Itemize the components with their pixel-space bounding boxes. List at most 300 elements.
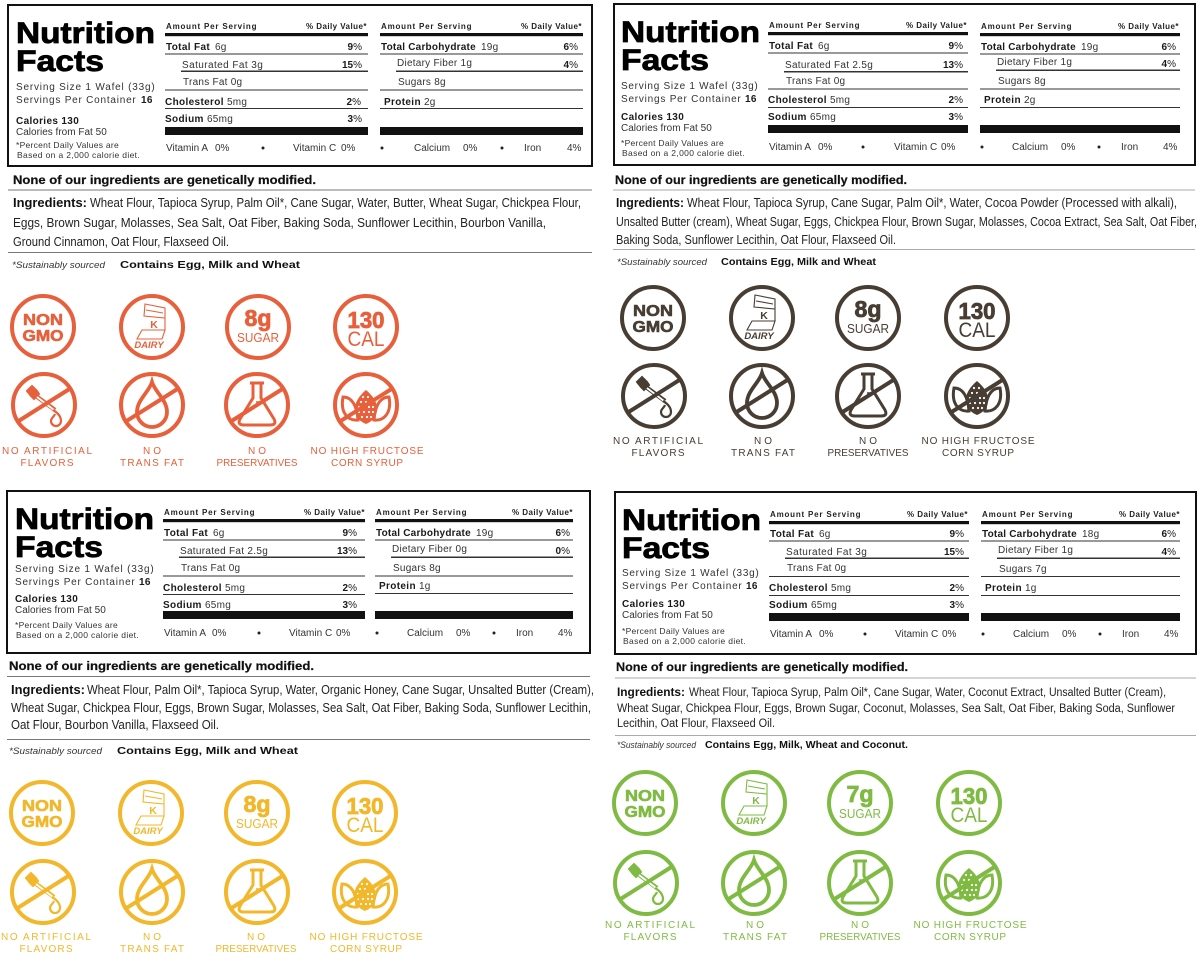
icon: non gmo: GMO bbox=[624, 804, 666, 821]
nutrient table: carbohydrates: Sugars 8g bbox=[398, 77, 446, 88]
vitamins row: 0% bbox=[818, 142, 833, 153]
GMO statement: None of our ingredients are genetically modified. bbox=[9, 659, 314, 673]
icon labels: NO ARTIFICIAL bbox=[1, 932, 91, 943]
nutrient table: fats: Trans Fat 0g bbox=[787, 563, 846, 574]
nutrient table: carbohydrates: Amount Per Serving bbox=[376, 508, 467, 517]
vitamins row: 4% bbox=[567, 143, 582, 154]
icon labels: NO bbox=[754, 436, 772, 447]
title bbox=[15, 503, 154, 564]
nutrient table: fats: Saturated Fat 3g bbox=[182, 60, 263, 71]
nutrient table: fats: 2% bbox=[347, 97, 361, 108]
icon: dairy bbox=[723, 772, 785, 834]
nutrient table: fats: Trans Fat 0g bbox=[786, 76, 845, 87]
icon: sugar: 8g bbox=[244, 791, 270, 817]
serving info: Serving Size 1 Wafel (33g) bbox=[622, 568, 759, 579]
nutrient table: fats bbox=[165, 22, 368, 135]
ingredients bbox=[617, 685, 1175, 730]
icon: calories bbox=[938, 772, 1000, 834]
panel: orange flavor bbox=[2, 5, 592, 469]
icon labels: NO HIGH FRUCTOSE bbox=[310, 446, 424, 457]
title: Facts bbox=[16, 45, 104, 78]
allergen note: Contains Egg, Milk and Wheat bbox=[117, 746, 299, 757]
nutrient table: fats: Cholesterol bbox=[163, 583, 222, 594]
nutrient table: carbohydrates: % Daily Value* bbox=[1119, 510, 1180, 519]
icon: dairy bbox=[120, 782, 182, 844]
vitamins row bbox=[769, 142, 1178, 153]
icon: sugar: SUGAR bbox=[847, 321, 889, 336]
icon labels: NO bbox=[248, 446, 266, 457]
icon: no high fructose corn syrup bbox=[938, 852, 1000, 914]
nutrient table: carbohydrates: % Daily Value* bbox=[521, 22, 582, 31]
nutrient table: fats: Sodium bbox=[163, 600, 202, 611]
ingredients: Ingredients: bbox=[616, 196, 684, 210]
nutrient table: fats: Sodium bbox=[769, 600, 808, 611]
serving info: Servings Per Container bbox=[621, 94, 741, 105]
icon labels: NO bbox=[851, 920, 869, 931]
nutrient table: carbohydrates bbox=[380, 22, 583, 135]
icon: calories: 130 bbox=[348, 307, 384, 333]
nutrient table: fats: Total Fat bbox=[770, 529, 814, 540]
icon labels: FLAVORS bbox=[20, 944, 73, 955]
icon: sugar bbox=[829, 772, 891, 834]
serving info: Based on a 2,000 calorie diet. bbox=[17, 150, 140, 160]
nutrition facts label bbox=[615, 492, 1196, 654]
title: Nutrition bbox=[16, 17, 155, 50]
icon labels: TRANS FAT bbox=[723, 932, 787, 943]
nutrient table: fats: 15% bbox=[342, 60, 362, 71]
ingredients: Wheat Flour, Tapioca Syrup, Palm Oil*, Cane Sugar, Water, Butter, Wheat Sugar, Chickpea Flour, bbox=[90, 195, 581, 210]
icon: non gmo bbox=[12, 296, 74, 358]
icon: dairy: DAIRY bbox=[736, 816, 767, 827]
serving info: Serving Size 1 Wafel (33g) bbox=[15, 564, 154, 575]
vitamins row: 0% bbox=[336, 628, 351, 639]
nutrient table: carbohydrates: Sugars 7g bbox=[999, 564, 1047, 575]
icon: no preservatives bbox=[829, 852, 891, 914]
icon: non gmo: GMO bbox=[22, 814, 62, 831]
panel: yellow flavor bbox=[1, 491, 594, 955]
nutrient table: fats: Amount Per Serving bbox=[769, 21, 860, 30]
nutrient table: carbohydrates: Total Carbohydrate bbox=[376, 528, 471, 539]
icon: no high fructose corn syrup bbox=[334, 861, 396, 923]
icon: calories: CAL bbox=[346, 814, 384, 837]
icon: sugar bbox=[227, 296, 289, 358]
icon: no artificial flavors bbox=[12, 861, 74, 923]
icon: no artificial flavors bbox=[623, 365, 685, 427]
nutrient table: carbohydrates: 19g bbox=[481, 42, 498, 53]
nutrient table: carbohydrates: 6% bbox=[1162, 42, 1176, 53]
vitamins row: Vitamin C bbox=[894, 142, 937, 153]
vitamins row: 0% bbox=[942, 629, 957, 640]
nutrient table: fats: 6g bbox=[819, 529, 831, 540]
nutrient table: fats: 5mg bbox=[227, 97, 247, 108]
icon: calories: CAL bbox=[958, 319, 996, 342]
nutrient table: fats: 9% bbox=[343, 528, 357, 539]
nutrient table: carbohydrates: 6% bbox=[1162, 529, 1176, 540]
icon: dairy: DAIRY bbox=[133, 826, 164, 837]
serving info: Calories 130 bbox=[621, 112, 684, 123]
serving info: Calories 130 bbox=[622, 599, 685, 610]
ingredients: Wheat Sugar, Chickpea Flour, Eggs, Brown Sugar, Molasses, Sea Salt, Oat Fiber, Baking Soda, Sunflower Lecithin, bbox=[11, 700, 591, 715]
icon: calories bbox=[334, 782, 396, 844]
serving info: Serving Size 1 Wafel (33g) bbox=[621, 81, 758, 92]
icon: non gmo: NON bbox=[633, 303, 673, 320]
ingredients: Wheat Flour, Tapioca Syrup, Palm Oil*, Cane Sugar, Water, Coconut Extract, Unsalted Butter (Cream), bbox=[689, 687, 1166, 699]
serving info: Servings Per Container bbox=[16, 95, 136, 106]
nutrient table: carbohydrates: 2g bbox=[424, 97, 436, 108]
nutrient table: fats: % Daily Value* bbox=[906, 21, 967, 30]
serving info: Based on a 2,000 calorie diet. bbox=[16, 630, 139, 640]
allergen note: *Sustainably sourced bbox=[12, 260, 106, 271]
nutrient table: fats: 3% bbox=[343, 600, 357, 611]
vitamins row: 0% bbox=[1061, 142, 1076, 153]
icon labels: NO ARTIFICIAL bbox=[613, 436, 703, 447]
icon: dairy: K bbox=[150, 319, 158, 331]
nutrient table: fats: Total Fat bbox=[164, 528, 208, 539]
nutrient table: carbohydrates: Total Carbohydrate bbox=[982, 529, 1077, 540]
vitamins row: Vitamin A bbox=[770, 629, 812, 640]
vitamins row bbox=[166, 143, 582, 154]
icon: sugar: SUGAR bbox=[237, 330, 279, 345]
icon labels: NO HIGH FRUCTOSE bbox=[310, 932, 423, 943]
icon labels: NO HIGH FRUCTOSE bbox=[914, 920, 1027, 931]
icon labels: PRESERVATIVES bbox=[820, 932, 901, 943]
nutrient table: carbohydrates: Protein bbox=[984, 95, 1021, 106]
nutrient table: fats: % Daily Value* bbox=[304, 508, 365, 517]
title: Nutrition bbox=[15, 503, 154, 536]
icon: non gmo bbox=[614, 772, 676, 834]
icon labels: NO bbox=[143, 932, 161, 943]
vitamins row: 0% bbox=[341, 143, 356, 154]
nutrient table: carbohydrates: Dietary Fiber 1g bbox=[998, 545, 1073, 556]
nutrient table: fats: 65mg bbox=[811, 600, 837, 611]
icon labels: CORN SYRUP bbox=[330, 944, 402, 955]
allergen note: Contains Egg, Milk and Wheat bbox=[721, 257, 877, 268]
vitamins row: Vitamin A bbox=[166, 143, 208, 154]
serving info: *Percent Daily Values are bbox=[621, 138, 724, 148]
nutrient table: fats: % Daily Value* bbox=[907, 510, 968, 519]
vitamins row bbox=[164, 628, 573, 639]
nutrient table: fats: 15% bbox=[944, 547, 964, 558]
nutrient table: fats: 13% bbox=[337, 546, 357, 557]
ingredients: Ground Cinnamon, Oat Flour, Flaxseed Oil. bbox=[13, 234, 229, 249]
icon: non gmo: NON bbox=[22, 798, 62, 815]
nutrient table: carbohydrates: Dietary Fiber 1g bbox=[997, 57, 1072, 68]
vitamins row: 0% bbox=[463, 143, 478, 154]
icon: dairy: DAIRY bbox=[744, 331, 775, 342]
nutrient table: carbohydrates: Amount Per Serving bbox=[981, 22, 1072, 31]
nutrient table: carbohydrates: 1g bbox=[1025, 583, 1037, 594]
icon labels: TRANS FAT bbox=[731, 448, 795, 459]
vitamins row: Vitamin C bbox=[289, 628, 332, 639]
allergen note bbox=[12, 260, 301, 271]
title bbox=[16, 17, 155, 78]
icon: calories: CAL bbox=[348, 328, 384, 351]
nutrient table: carbohydrates: Amount Per Serving bbox=[381, 22, 472, 31]
nutrient table: carbohydrates: Total Carbohydrate bbox=[381, 42, 476, 53]
nutrition facts label bbox=[8, 5, 592, 166]
icon: no high fructose corn syrup bbox=[946, 365, 1008, 427]
icon labels: FLAVORS bbox=[20, 458, 74, 469]
icon: sugar bbox=[226, 782, 288, 844]
nutrient table: fats: Cholesterol bbox=[769, 583, 828, 594]
icon: dairy bbox=[731, 287, 793, 349]
serving info: Calories 130 bbox=[16, 116, 79, 127]
vitamins row: Calcium bbox=[407, 628, 443, 639]
nutrition facts label bbox=[614, 4, 1195, 165]
icon: dairy: K bbox=[760, 310, 768, 322]
serving info: Calories from Fat 50 bbox=[621, 123, 712, 134]
GMO statement: None of our ingredients are genetically modified. bbox=[616, 660, 908, 674]
icon: non gmo bbox=[11, 782, 73, 844]
vitamins row: 0% bbox=[215, 143, 230, 154]
nutrient table: fats: Saturated Fat 2.5g bbox=[785, 60, 873, 71]
panel: brown flavor bbox=[613, 4, 1197, 459]
icon: no high fructose corn syrup bbox=[335, 374, 397, 436]
nutrient table: fats bbox=[768, 21, 968, 133]
icon: dairy: K bbox=[149, 805, 157, 817]
serving info bbox=[15, 564, 154, 640]
nutrient table: fats: Trans Fat 0g bbox=[181, 563, 240, 574]
icon: non gmo bbox=[622, 287, 684, 349]
icon labels: NO ARTIFICIAL bbox=[2, 446, 92, 457]
nutrition facts label bbox=[7, 491, 590, 653]
icon labels bbox=[2, 446, 424, 469]
ingredients: Eggs, Brown Sugar, Molasses, Sea Salt, Oat Fiber, Baking Soda, Sunflower Lecithin, Bourbon Vanilla, bbox=[13, 215, 546, 230]
nutrient table: fats: 5mg bbox=[225, 583, 245, 594]
nutrient table: fats: 2% bbox=[343, 583, 357, 594]
nutrient table: fats: Amount Per Serving bbox=[166, 22, 257, 31]
allergen note bbox=[617, 257, 877, 268]
ingredients: Baking Soda, Sunflower Lecithin, Oat Flour, Flaxseed Oil. bbox=[616, 232, 896, 247]
nutrient table: fats: Amount Per Serving bbox=[770, 510, 861, 519]
icon labels: NO bbox=[247, 932, 265, 943]
serving info: 16 bbox=[745, 94, 757, 105]
serving info: 16 bbox=[746, 581, 758, 592]
ingredients: Wheat Sugar, Chickpea Flour, Eggs, Brown Sugar, Coconut, Molasses, Sea Salt, Oat Fiber, Baking Soda, Sunflower bbox=[617, 703, 1175, 715]
icon: sugar: 8g bbox=[244, 305, 272, 331]
nutrient table: fats: Amount Per Serving bbox=[164, 508, 255, 517]
icon labels: NO bbox=[859, 436, 877, 447]
serving info bbox=[621, 81, 758, 158]
icon labels: CORN SYRUP bbox=[331, 458, 403, 469]
nutrient table: fats bbox=[769, 510, 969, 621]
nutrient table: carbohydrates: 19g bbox=[476, 528, 493, 539]
nutrient table: carbohydrates: 4% bbox=[1162, 547, 1176, 558]
ingredients bbox=[11, 682, 594, 732]
vitamins row: Iron bbox=[524, 143, 541, 154]
nutrient table: carbohydrates: 19g bbox=[1081, 42, 1098, 53]
icon: non gmo: GMO bbox=[22, 328, 64, 345]
nutrient table: carbohydrates: 6% bbox=[556, 528, 570, 539]
icon labels: FLAVORS bbox=[624, 932, 677, 943]
icon labels: FLAVORS bbox=[632, 448, 685, 459]
nutrient table: fats: 65mg bbox=[207, 114, 233, 125]
icon labels: CORN SYRUP bbox=[942, 448, 1014, 459]
nutrient table: fats: Cholesterol bbox=[165, 97, 224, 108]
nutrient table: carbohydrates bbox=[980, 22, 1180, 133]
title: Nutrition bbox=[622, 504, 761, 537]
nutrient table: fats: 6g bbox=[213, 528, 225, 539]
icon: calories bbox=[946, 287, 1008, 349]
vitamins row bbox=[770, 629, 1179, 640]
serving info: Serving Size 1 Wafel (33g) bbox=[16, 82, 155, 93]
vitamins row: 0% bbox=[212, 628, 227, 639]
icon: calories bbox=[335, 296, 397, 358]
title: Facts bbox=[622, 532, 710, 565]
panel: green flavor bbox=[605, 492, 1196, 943]
allergen note bbox=[617, 740, 908, 751]
icon: no trans fat bbox=[121, 861, 183, 923]
nutrient table: fats: 9% bbox=[949, 41, 963, 52]
nutrient table: fats: % Daily Value* bbox=[306, 22, 367, 31]
nutrient table: fats: Total Fat bbox=[769, 41, 813, 52]
icon labels: CORN SYRUP bbox=[934, 932, 1006, 943]
vitamins row: Calcium bbox=[414, 143, 450, 154]
allergen note: Contains Egg, Milk and Wheat bbox=[120, 260, 301, 271]
icon labels: PRESERVATIVES bbox=[216, 458, 298, 469]
serving info: 16 bbox=[139, 577, 151, 588]
ingredients bbox=[13, 195, 581, 249]
ingredients: Ingredients: bbox=[13, 196, 87, 210]
serving info bbox=[622, 568, 759, 646]
nutrient table: carbohydrates: Amount Per Serving bbox=[982, 510, 1073, 519]
icon: sugar: 8g bbox=[854, 296, 882, 322]
icon: dairy: K bbox=[752, 795, 760, 807]
icon labels: TRANS FAT bbox=[120, 944, 184, 955]
nutrient table: fats: Total Fat bbox=[166, 42, 210, 53]
nutrient table: fats: 9% bbox=[950, 529, 964, 540]
nutrient table: carbohydrates: Dietary Fiber 0g bbox=[392, 544, 467, 555]
nutrient table: fats: 65mg bbox=[810, 112, 836, 123]
icon: no preservatives bbox=[226, 861, 288, 923]
serving info: *Percent Daily Values are bbox=[622, 626, 725, 636]
icon: no artificial flavors bbox=[13, 374, 75, 436]
allergen note bbox=[9, 746, 299, 757]
vitamins row: Iron bbox=[1121, 142, 1138, 153]
serving info bbox=[16, 82, 155, 160]
nutrient table: fats: 3% bbox=[949, 112, 963, 123]
nutrient table: carbohydrates: Sugars 8g bbox=[998, 76, 1046, 87]
nutrient table: carbohydrates: Total Carbohydrate bbox=[981, 42, 1076, 53]
icon: non gmo: GMO bbox=[632, 319, 674, 336]
icon labels bbox=[1, 932, 423, 955]
nutrient table: fats: Cholesterol bbox=[768, 95, 827, 106]
icon: non gmo: NON bbox=[23, 312, 63, 329]
title bbox=[621, 16, 760, 77]
vitamins row: Vitamin A bbox=[164, 628, 206, 639]
nutrient table: carbohydrates: 4% bbox=[1162, 59, 1176, 70]
vitamins row: Iron bbox=[516, 628, 533, 639]
serving info: Based on a 2,000 calorie diet. bbox=[622, 148, 745, 158]
allergen note: *Sustainably sourced bbox=[9, 746, 103, 757]
allergen note: *Sustainably sourced bbox=[617, 740, 697, 750]
nutrient table: fats: 65mg bbox=[205, 600, 231, 611]
nutrient table: fats: Sodium bbox=[768, 112, 807, 123]
icon: calories: 130 bbox=[346, 793, 384, 819]
icon labels: PRESERVATIVES bbox=[216, 944, 297, 955]
serving info: Calories from Fat 50 bbox=[16, 127, 107, 138]
nutrient table: fats: 2% bbox=[950, 583, 964, 594]
vitamins row: Vitamin C bbox=[895, 629, 938, 640]
nutrient table: fats: Sodium bbox=[165, 114, 204, 125]
nutrient table: fats: 3% bbox=[950, 600, 964, 611]
nutrient table: fats: 9% bbox=[348, 42, 362, 53]
icon: non gmo: NON bbox=[625, 788, 665, 805]
icon: dairy: DAIRY bbox=[134, 340, 165, 351]
icon: sugar bbox=[837, 287, 899, 349]
title: Facts bbox=[15, 531, 103, 564]
icon: calories: 130 bbox=[950, 783, 988, 809]
nutrient table: carbohydrates: 0% bbox=[556, 546, 570, 557]
serving info: Servings Per Container bbox=[622, 581, 742, 592]
nutrient table: carbohydrates: 2g bbox=[1024, 95, 1036, 106]
vitamins row: 4% bbox=[558, 628, 573, 639]
vitamins row: Iron bbox=[1122, 629, 1139, 640]
nutrient table: fats: Saturated Fat 2.5g bbox=[180, 546, 268, 557]
vitamins row: Vitamin C bbox=[293, 143, 336, 154]
serving info: *Percent Daily Values are bbox=[16, 140, 119, 150]
vitamins row: Calcium bbox=[1013, 629, 1049, 640]
title: Nutrition bbox=[621, 16, 760, 49]
vitamins row: 4% bbox=[1164, 629, 1179, 640]
icon: no preservatives bbox=[837, 365, 899, 427]
nutrient table: carbohydrates: Protein bbox=[384, 97, 421, 108]
icon: sugar: SUGAR bbox=[839, 806, 881, 821]
nutrient table: carbohydrates: 1g bbox=[419, 581, 431, 592]
nutrient table: fats bbox=[163, 508, 365, 619]
allergen note: *Sustainably sourced bbox=[617, 257, 708, 268]
serving info: Servings Per Container bbox=[15, 577, 135, 588]
serving info: *Percent Daily Values are bbox=[15, 620, 118, 630]
nutrient table: carbohydrates: 18g bbox=[1082, 529, 1099, 540]
nutrient table: carbohydrates: Dietary Fiber 1g bbox=[397, 58, 472, 69]
icon labels: PRESERVATIVES bbox=[828, 448, 909, 459]
nutrient table: fats: 13% bbox=[943, 60, 963, 71]
icon labels: NO ARTIFICIAL bbox=[605, 920, 695, 931]
nutrient table: fats: 6g bbox=[818, 41, 830, 52]
nutrient table: fats: 5mg bbox=[831, 583, 851, 594]
icon labels bbox=[605, 920, 1027, 943]
nutrient table: fats: Saturated Fat 3g bbox=[786, 547, 867, 558]
icon labels: TRANS FAT bbox=[120, 458, 184, 469]
vitamins row: 0% bbox=[819, 629, 834, 640]
nutrient table: carbohydrates: 6% bbox=[564, 42, 578, 53]
nutrient table: carbohydrates: % Daily Value* bbox=[512, 508, 573, 517]
nutrient table: fats: Trans Fat 0g bbox=[183, 77, 242, 88]
vitamins row: Calcium bbox=[1012, 142, 1048, 153]
nutrient table: carbohydrates: Protein bbox=[985, 583, 1022, 594]
nutrient table: fats: 6g bbox=[215, 42, 227, 53]
icon: no preservatives bbox=[226, 374, 288, 436]
icon: no trans fat bbox=[731, 365, 793, 427]
icon: sugar: 7g bbox=[846, 781, 874, 807]
icon labels bbox=[613, 436, 1035, 459]
icon: no artificial flavors bbox=[615, 852, 677, 914]
vitamins row: 0% bbox=[941, 142, 956, 153]
nutrient table: carbohydrates bbox=[375, 508, 573, 619]
nutrient table: carbohydrates: 4% bbox=[564, 60, 578, 71]
vitamins row: Vitamin A bbox=[769, 142, 811, 153]
ingredients: Oat Flour, Bourbon Vanilla, Flaxseed Oil. bbox=[11, 717, 219, 732]
icon: dairy bbox=[121, 296, 183, 358]
icon: no trans fat bbox=[723, 852, 785, 914]
icon: sugar: SUGAR bbox=[236, 816, 278, 831]
GMO statement: None of our ingredients are genetically modified. bbox=[615, 173, 907, 187]
icon labels: NO bbox=[746, 920, 764, 931]
serving info: Calories 130 bbox=[15, 594, 78, 605]
GMO statement: None of our ingredients are genetically modified. bbox=[13, 173, 316, 187]
ingredients: Ingredients: bbox=[11, 683, 85, 697]
